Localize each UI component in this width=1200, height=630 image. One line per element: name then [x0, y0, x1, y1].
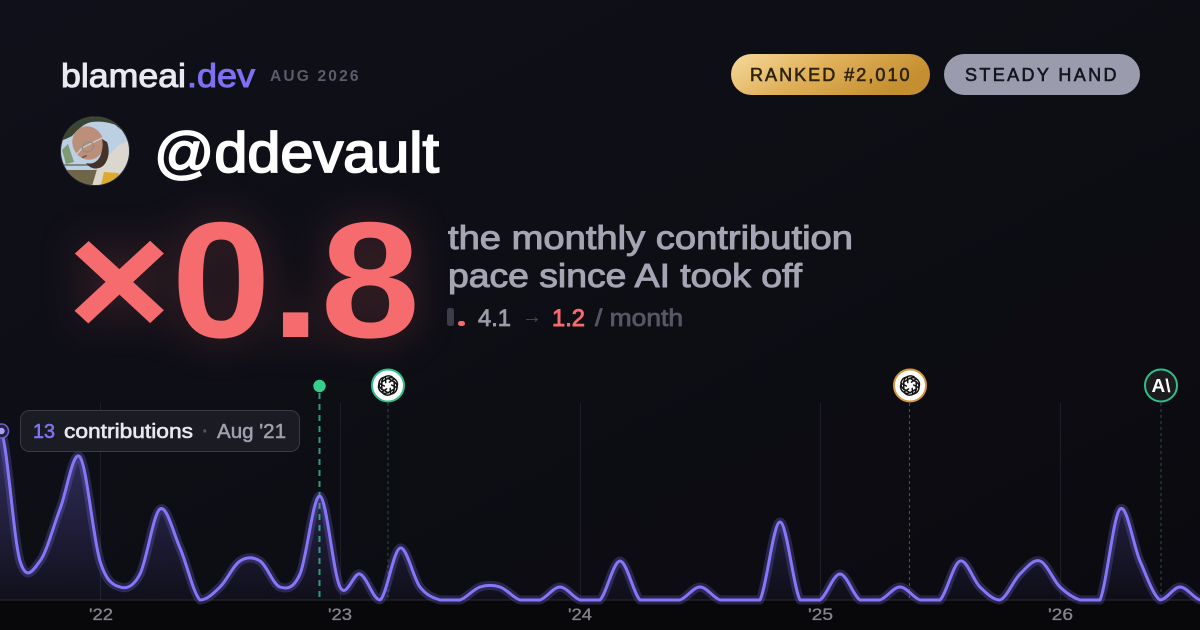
year labels: '22 [89, 606, 113, 624]
badge: archetype: STEADY HAND [965, 65, 1116, 85]
pace stat: → [522, 306, 542, 328]
avatar [60, 116, 130, 186]
tooltip: Aug '21 [217, 421, 286, 443]
pace stat: 1.2 [552, 305, 585, 332]
icon: Anthropic on green ring: A\ [1152, 376, 1170, 396]
description: the monthly contribution [448, 220, 853, 257]
icon: Anthropic on green ring [1145, 370, 1177, 402]
icon: OpenAI on orange ring [894, 370, 926, 402]
description: pace since AI took off [448, 258, 803, 295]
release marker: ChatGPT launch line [387, 403, 389, 600]
description [448, 220, 853, 295]
year labels [89, 606, 1073, 624]
year labels: '23 [328, 606, 352, 624]
release marker: Claude line [1160, 403, 1162, 600]
tooltip: · [202, 421, 209, 443]
pace stat: / month [595, 305, 683, 332]
brand logo: .dev [187, 57, 256, 94]
year labels: '25 [808, 606, 833, 624]
baseline axis [0, 599, 1200, 601]
date label: AUG 2026 [270, 68, 359, 85]
pace stat [447, 305, 683, 332]
chart [0, 370, 1200, 624]
tooltip: 13 [33, 421, 55, 443]
icon: OpenAI on green ring [372, 370, 404, 402]
year labels: '24 [568, 606, 592, 624]
pace stat: 4.1 [478, 305, 511, 332]
mini bars [447, 308, 465, 326]
brand logo [61, 57, 256, 94]
badge: rank [731, 54, 930, 95]
year labels: '26 [1048, 606, 1073, 624]
contributions line [0, 431, 1200, 600]
badge: archetype [944, 54, 1140, 95]
username: @ddevault [154, 121, 439, 185]
peak point marker [0, 424, 8, 438]
AI takeoff marker line [318, 393, 320, 600]
brand logo: blameai [61, 57, 186, 94]
release marker: GPT line [908, 403, 910, 600]
takeoff dot [313, 380, 326, 392]
tooltip: contributions [64, 421, 193, 443]
badge: rank: RANKED #2,010 [750, 65, 910, 85]
tooltip [20, 410, 300, 452]
area fill [0, 431, 1200, 600]
big multiplier: ×0.8 [67, 188, 420, 372]
year gridlines [100, 403, 1060, 600]
